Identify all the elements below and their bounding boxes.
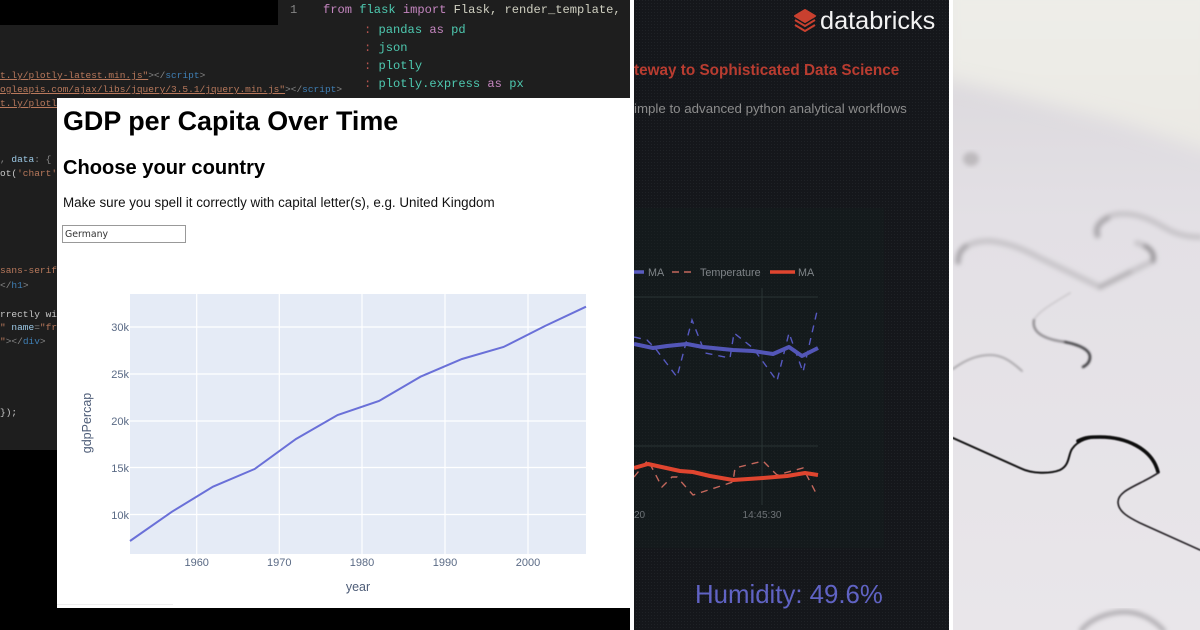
panel: html code editor: [0, 25, 346, 98]
logo wordmark: databricks: [820, 7, 935, 35]
data line: [130, 307, 586, 541]
x axis labels: 20: [634, 510, 646, 521]
line chart: GDP per capita: [80, 294, 586, 594]
code line: closing h1: </h1>: [0, 280, 29, 291]
y axis title: gdpPercap: [80, 393, 94, 453]
y axis tick labels: 25k: [111, 369, 129, 381]
code line: plotly script tag: t.ly/plotly-latest.min.js"></script>: [0, 70, 205, 81]
code fragments clipped by white panel: [0, 98, 57, 418]
foreground blurred arc: [1080, 612, 1165, 630]
y axis tick labels: 15k: [111, 463, 129, 475]
code line: flask import: from flask import Flask, render_template,: [323, 3, 621, 17]
x axis tick labels: 1970: [267, 557, 292, 569]
line number: 1: [290, 3, 297, 17]
code line: pandas import: : pandas as pd: [364, 23, 466, 37]
chart legend: [634, 267, 815, 279]
humidity readout: Humidity: 49.6%: [695, 581, 883, 609]
far puzzle edges: [958, 214, 1200, 287]
country input: [62, 225, 186, 243]
x axis tick labels: 1960: [184, 557, 209, 569]
title: GDP per Capita Over Time: [63, 106, 398, 136]
code line: plotly import: : plotly: [364, 59, 422, 73]
chart legend: Temperature: [700, 267, 761, 279]
x axis labels: [634, 510, 782, 521]
subheading: Choose your country: [63, 157, 265, 179]
country input: Germany: [65, 229, 108, 240]
dashboard subheading: imple to advanced python analytical workflows: [634, 101, 907, 116]
x axis tick labels: 2000: [516, 557, 540, 569]
x axis tick labels: 1980: [350, 557, 374, 569]
blurred background: [940, 0, 1200, 155]
code line: input name: " name="fr: [0, 322, 57, 333]
chart grid: [634, 288, 818, 505]
panel: python code editor: [278, 0, 630, 98]
middle puzzle edges: [953, 293, 1090, 371]
panel: html code editor left strip: [0, 25, 57, 450]
code line: plotly express import: : plotly.express as px: [364, 77, 524, 91]
panel: GDP web app: [57, 98, 630, 608]
code line: jquery script tag: ogleapis.com/ajax/libs/jquery/3.5.1/jquery.min.js"></script>: [0, 84, 342, 95]
y axis tick labels: 10k: [111, 510, 129, 522]
code line: spell correctly: rrectly wi: [0, 309, 57, 320]
y axis tick labels: 20k: [111, 416, 129, 428]
chart legend: MA: [648, 267, 665, 279]
code line: json import: : json: [364, 41, 408, 55]
panel: databricks dashboard: [634, 0, 949, 630]
panel: black backdrop of code and chart collage: [0, 0, 630, 630]
instruction text: Make sure you spell it correctly with capital letter(s), e.g. United Kingdom: [63, 195, 495, 210]
blurred spot: [963, 152, 979, 166]
x axis title: year: [346, 580, 370, 594]
x axis labels: 14:45:30: [743, 510, 782, 521]
code line: sans-serif: sans-serif: [0, 265, 57, 276]
temperature dashed series: [634, 460, 818, 497]
icon: databricks logo: [795, 10, 815, 31]
humidity dashed series: [634, 307, 818, 381]
dashboard heading: teway to Sophisticated Data Science: [634, 62, 899, 79]
y axis tick labels: [111, 322, 129, 522]
code line: chart: ot('chart': [0, 168, 57, 179]
code line: data: , data: {: [0, 154, 51, 165]
code line: closing brackets: });: [0, 407, 17, 418]
humidity moving average: [634, 344, 818, 356]
panel: puzzle pieces photo: [953, 0, 1200, 630]
x axis tick labels: [184, 557, 540, 569]
x axis tick labels: 1990: [433, 557, 457, 569]
near puzzle edge: [953, 437, 1200, 550]
divider remnant: [57, 604, 173, 605]
chart legend: MA: [798, 267, 815, 279]
temperature moving average: [634, 464, 818, 480]
y axis tick labels: 30k: [111, 322, 129, 334]
code line: closing div: "></div>: [0, 336, 46, 347]
code line: plotly url: t.ly/plotl: [0, 98, 57, 109]
